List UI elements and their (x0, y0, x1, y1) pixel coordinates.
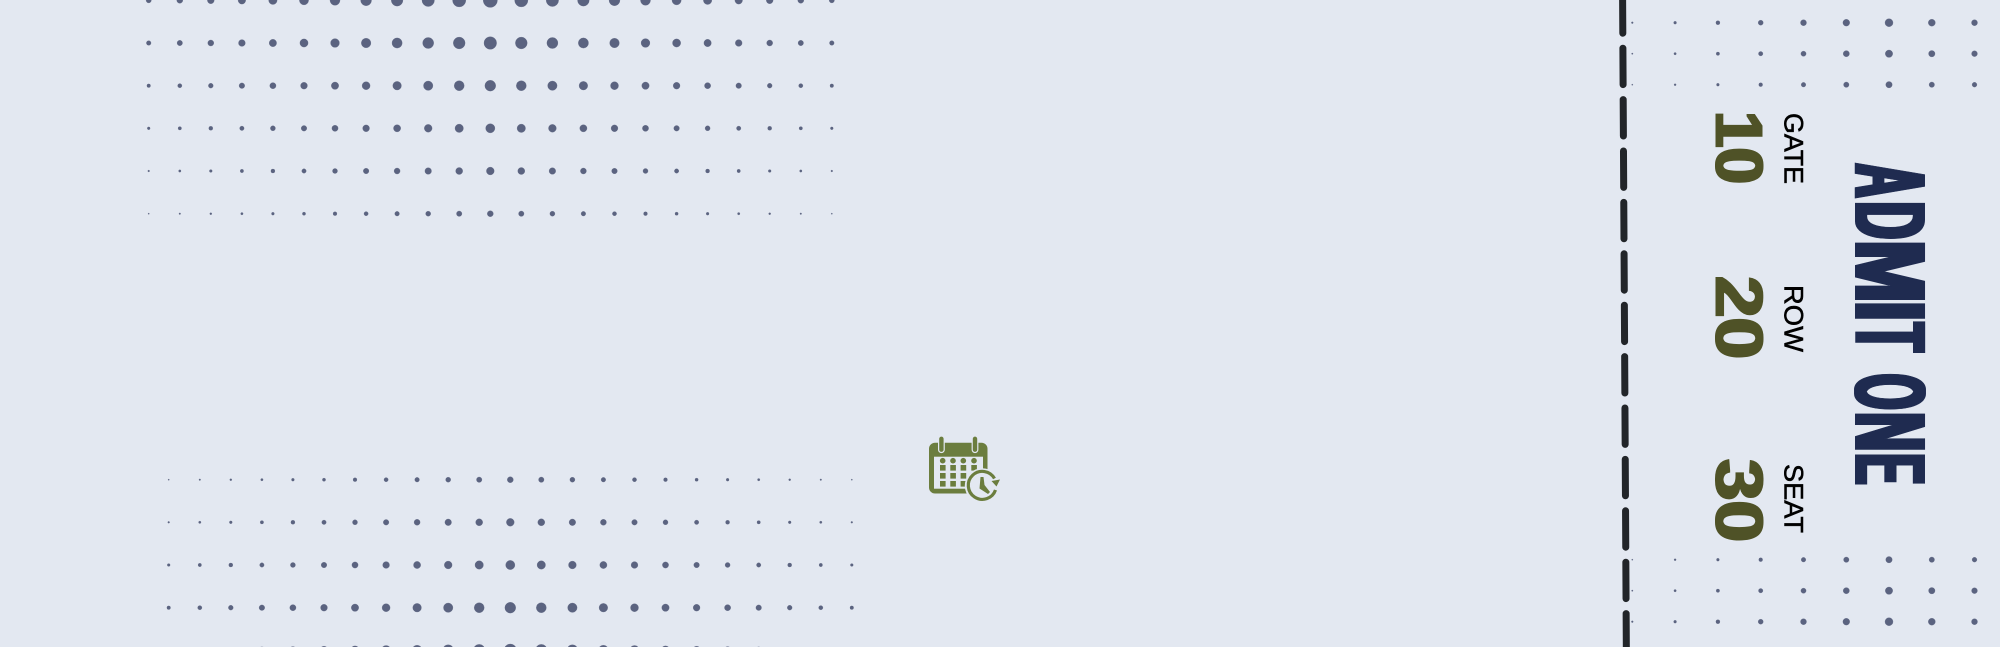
heading: admit one: I (1834, 301, 1946, 321)
heading: admit one: M (1834, 240, 1946, 303)
halftone dot grid: stub top (1631, 19, 1978, 88)
label: gate: GATE (1778, 113, 1808, 184)
halftone dot grid: top left (146, 0, 834, 217)
label: row: ROW (1778, 285, 1808, 353)
halftone dot grid: bottom left (166, 477, 854, 647)
heading: admit one: N (1834, 412, 1946, 451)
heading: admit one: D (1834, 202, 1946, 239)
halftone dot grid: stub bottom (1631, 556, 1978, 626)
icon: calendar with clock (929, 436, 1000, 503)
value: row 20: 20 (1701, 276, 1776, 359)
heading: admit one: A (1834, 164, 1946, 197)
text: E (1834, 454, 1946, 484)
heading: admit one: T (1834, 323, 1946, 351)
value: seat 30: 30 (1701, 459, 1776, 542)
value: gate 10: 10 (1701, 111, 1776, 184)
perforated dashed divider (1623, 0, 1626, 647)
heading: admit one: O (1834, 374, 1946, 409)
label: seat: SEAT (1778, 464, 1808, 533)
heading: admit one (1834, 164, 1946, 484)
